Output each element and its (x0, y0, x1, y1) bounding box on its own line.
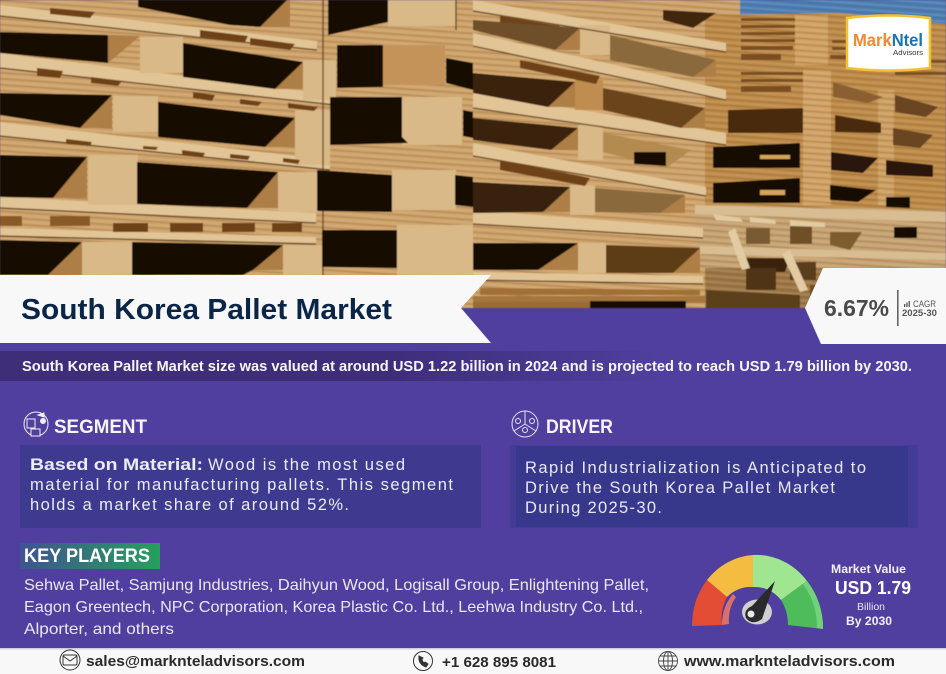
segment text: Wood is the most used (208, 456, 405, 474)
logo subtitle: Advisors (893, 48, 923, 57)
lower pale pallets (746, 226, 917, 299)
dark pallet openings (0, 0, 938, 308)
logo (847, 16, 930, 70)
market value unit: Billion (857, 602, 885, 613)
market value callout (831, 562, 911, 628)
panel: segment (20, 412, 481, 528)
block sides: pale stacks (82, 0, 610, 275)
back stack stripes (741, 18, 946, 195)
shaded block sides (48, 0, 716, 275)
key players heading (20, 543, 160, 569)
light planks (0, 0, 946, 284)
key players list: Eagon Greentech, NPC Corporation, Korea Plastic Co. Ltd., Leehwa Industry Co. Ltd., (24, 599, 643, 616)
key players list: Sehwa Pallet, Samjung Industries, Daihyun Wood, Logisall Group, Enlightening Pallet, (24, 577, 649, 594)
segment text: material for manufacturing pallets. This segment (30, 476, 453, 494)
icon: globe (658, 652, 678, 670)
website: www.marknteladvisors.com (683, 653, 895, 670)
email: sales@marknteladvisors.com (86, 653, 305, 670)
small plank gaps (0, 8, 700, 295)
market value callout: Market Value (831, 562, 906, 576)
driver text: Rapid Industrialization is Anticipated to (525, 459, 866, 477)
phone: +1 628 895 8081 (442, 654, 556, 671)
summary text: South Korea Pallet Market size was valued at around USD 1.22 billion in 2024 and is projected to reach USD 1.79 billion by 2030. (22, 358, 912, 375)
gauge hub (742, 600, 772, 624)
hero photo: stacked wooden pallets (0, 0, 946, 308)
segment text: holds a market share of around 52%. (30, 496, 349, 514)
driver text: Drive the South Korea Pallet Market (525, 479, 835, 497)
plank shadow lines (0, 0, 726, 284)
segment heading: SEGMENT (54, 417, 147, 438)
market value number: USD 1.79 (835, 578, 911, 598)
CAGR badge (805, 268, 946, 344)
gauge needle (745, 581, 775, 622)
icon: driver (512, 411, 538, 437)
CAGR label: CAGR (913, 299, 936, 309)
segment text: Based on Material: (30, 456, 203, 474)
title: South Korea Pallet Market (21, 294, 392, 326)
driver heading: DRIVER (546, 417, 613, 438)
title banner (0, 275, 491, 343)
key players list: Alporter, and others (24, 621, 174, 638)
CAGR period: 2025-30 (902, 308, 937, 319)
icon: phone (414, 652, 432, 670)
CAGR value: 6.67% (824, 295, 889, 321)
icon: small bars (904, 301, 910, 307)
footer (0, 648, 946, 674)
summary band (0, 351, 912, 381)
icon: email (60, 650, 80, 670)
market value year: By 2030 (846, 614, 892, 628)
panel: key players: KEY PLAYERS (24, 546, 150, 567)
logo wordmark: MarkNtel (853, 30, 923, 50)
key players list (24, 577, 649, 638)
segment box (20, 445, 481, 528)
panel: key players (20, 543, 649, 638)
driver text: During 2025-30. (525, 499, 662, 517)
segment text (30, 456, 453, 514)
icon: segment (24, 412, 48, 436)
driver text (525, 459, 866, 517)
gauge chart (692, 555, 823, 629)
panel: driver (510, 411, 918, 528)
driver box (510, 445, 918, 528)
